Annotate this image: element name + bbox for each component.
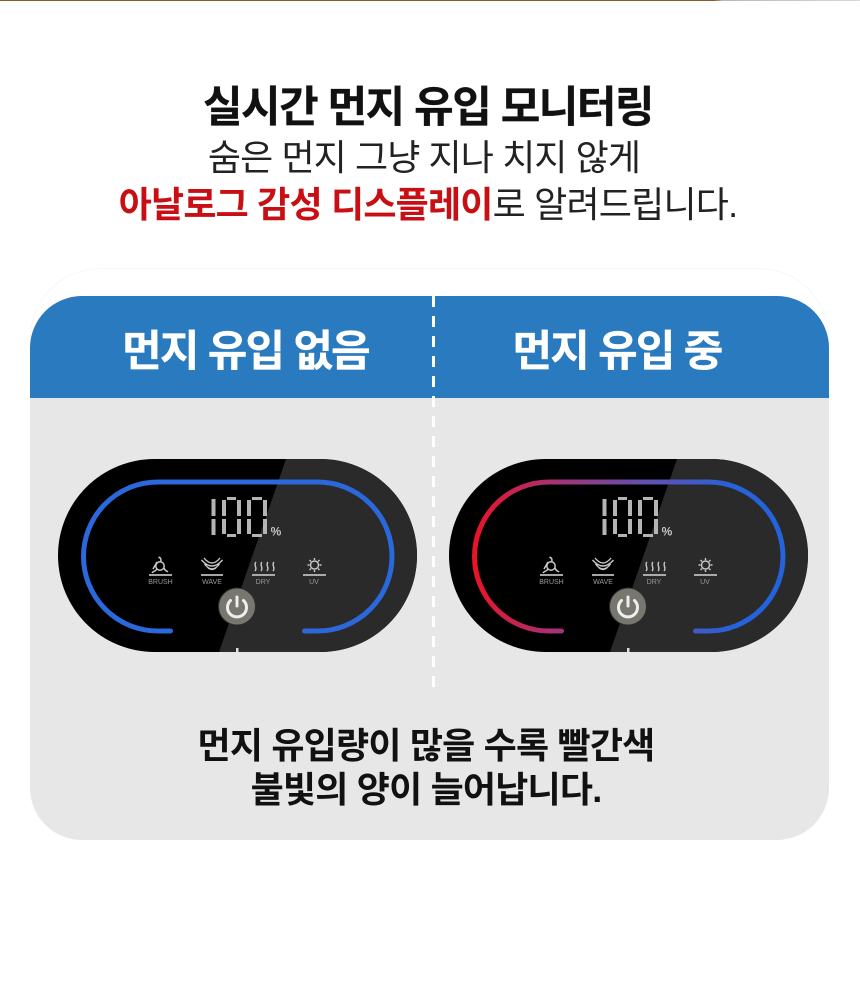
mode labels: UV xyxy=(309,579,319,586)
subtitle highlight line: 아날로그 감성 디스플레이로 알려드립니다. xyxy=(119,184,737,225)
subtitle line: 숨은 먼지 그냥 지나 치지 않게 xyxy=(208,137,640,178)
chart: display panels xyxy=(58,459,808,652)
icon: uv xyxy=(698,558,712,572)
icon: uv xyxy=(308,558,322,572)
heading: no dust: 먼지 유입 없음 xyxy=(122,328,369,376)
indicator tick xyxy=(236,648,238,652)
icon: dry xyxy=(255,562,274,571)
percent readout xyxy=(214,498,265,536)
display: dust flowing xyxy=(449,459,811,652)
power button xyxy=(610,588,646,625)
top edge strip xyxy=(0,0,860,1)
mode labels: BRUSH xyxy=(148,579,173,586)
icon: brush xyxy=(152,557,168,573)
power button xyxy=(218,588,256,625)
caption xyxy=(198,725,654,810)
mode underlines xyxy=(149,574,326,576)
indicator tick xyxy=(627,648,630,652)
mode labels: UV xyxy=(700,579,710,586)
display: no dust xyxy=(58,459,420,652)
caption: 불빛의 양이 늘어납니다. xyxy=(251,769,601,810)
percent readout xyxy=(604,498,656,536)
mode labels: BRUSH xyxy=(539,579,564,586)
icon: brush xyxy=(543,557,559,573)
mode labels: DRY xyxy=(647,579,662,586)
icon: dry xyxy=(646,562,665,571)
ring: gradient xyxy=(475,482,783,631)
mode labels: DRY xyxy=(256,579,271,586)
mode labels: WAVE xyxy=(593,579,613,586)
heading: dust flowing: 먼지 유입 중 xyxy=(512,328,722,376)
display: dust flowing: % xyxy=(662,524,673,538)
panel: comparison card xyxy=(30,296,829,840)
mode underlines xyxy=(540,574,717,576)
mode labels xyxy=(539,579,710,586)
header band xyxy=(30,296,829,398)
ring: blue xyxy=(83,482,392,631)
faint card outline xyxy=(30,268,829,569)
center dashed divider xyxy=(432,296,435,687)
mode labels xyxy=(148,579,319,586)
mode labels: WAVE xyxy=(202,579,222,586)
icon: wave xyxy=(202,558,222,570)
title: 실시간 먼지 유입 모니터링 xyxy=(203,84,653,132)
icon: wave xyxy=(592,558,614,570)
display: no dust: % xyxy=(271,524,282,538)
caption: 먼지 유입량이 많을 수록 빨간색 xyxy=(198,725,654,766)
